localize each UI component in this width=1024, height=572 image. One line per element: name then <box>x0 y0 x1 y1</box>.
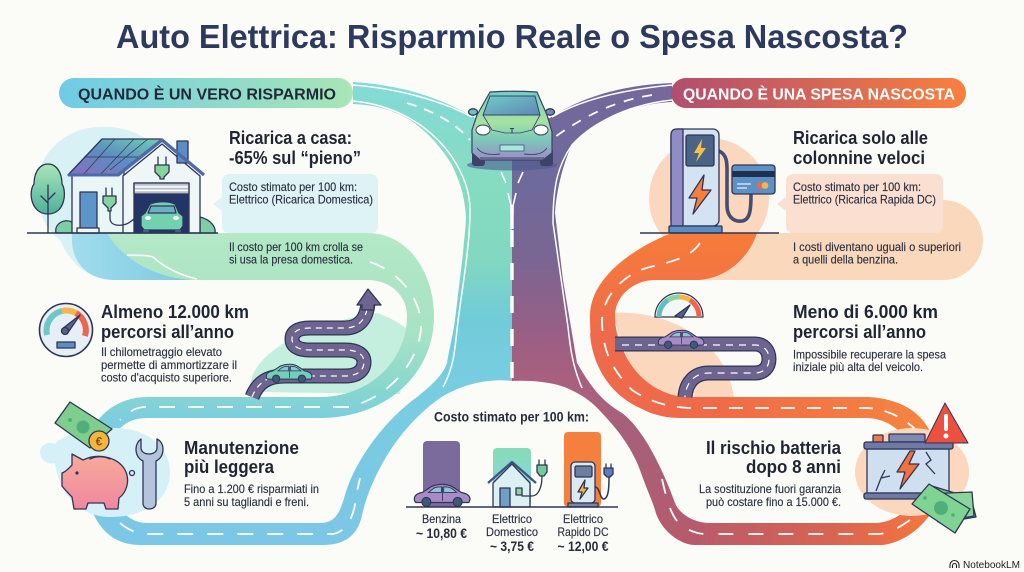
pill: right heading: QUANDO È UNA SPESA NASCOSTA <box>683 84 955 104</box>
icon: plug on gable <box>155 157 169 179</box>
icon: central front car: T <box>510 128 515 135</box>
heading: manutenzione <box>184 437 299 477</box>
callout: left cost bubble: Costo stimato per 100 km: <box>229 180 357 194</box>
text: meno di 6.000 km <box>793 348 946 374</box>
text: manutenzione: Fino a 1.200 € risparmiati in <box>184 482 319 496</box>
heading: ricarica a casa: Ricarica a casa: <box>229 127 352 148</box>
icon: car in garage <box>141 202 183 230</box>
icon: charging station <box>640 129 779 233</box>
heading: manutenzione: più leggera <box>184 456 275 477</box>
icon: right winding road <box>615 344 769 397</box>
icon: plug on wall with cable <box>103 188 116 211</box>
label: elettrico domestico: ~ 3,75 € <box>490 539 534 554</box>
text: rischio batteria <box>699 482 841 509</box>
text: colonnine veloci: I costi diventano uguali o superiori <box>793 240 961 254</box>
icon: banknote <box>55 402 112 448</box>
heading: ricarica solo alle colonnine: colonnine veloci <box>793 147 925 168</box>
text: meno di 6.000 km: iniziale più alta del veicolo. <box>793 360 923 374</box>
left backdrop: house circle <box>36 127 175 280</box>
label: elettrico rapido: Rapido DC <box>558 525 609 539</box>
left road: green loop <box>88 233 434 450</box>
label: elettrico domestico: Domestico <box>486 525 538 539</box>
bar: elettrico domestico <box>493 448 531 507</box>
label: benzina: Benzina <box>422 512 461 526</box>
heading: meno di 6.000 km <box>793 301 938 342</box>
heading: almeno 12.000 km: percorsi all’anno <box>101 321 234 342</box>
heading: manutenzione: Manutenzione <box>184 437 299 458</box>
icon: wrench <box>136 439 163 509</box>
heading: ricarica a casa <box>229 127 361 168</box>
label: elettrico rapido: ~ 12,00 € <box>558 539 609 554</box>
callout: left cost bubble <box>213 174 378 233</box>
label: benzina <box>416 512 467 541</box>
icon: petrol car <box>414 484 470 506</box>
left main road and stem <box>90 82 512 545</box>
text: chilometraggio: permette di ammortizzare il <box>101 358 237 372</box>
icon: euro coin <box>89 431 109 451</box>
heading: ricarica a casa: -65% sul “pieno” <box>229 147 361 168</box>
right road: orange loop <box>590 233 935 445</box>
pill: right heading <box>671 78 966 108</box>
panel: cost comparison <box>406 410 618 554</box>
bar: benzina <box>423 441 460 507</box>
icon: credit card <box>732 165 775 194</box>
text: chilometraggio <box>101 345 237 384</box>
heading: rischio batteria: Il rischio batteria <box>706 437 842 458</box>
heading: rischio batteria: dopo 8 anni <box>746 456 841 477</box>
right backdrop: peach band <box>690 200 983 280</box>
label: elettrico rapido: Elettrico <box>563 512 603 526</box>
label: benzina: ~ 10,80 € <box>416 526 467 541</box>
icon: small house with plug <box>488 460 547 507</box>
callout: left cost bubble: Elettrico (Ricarica Domestica) <box>229 192 373 206</box>
text: chilometraggio: costo d'acquisto superiore. <box>101 370 232 384</box>
heading: cost comparison: Costo stimato per 100 km: <box>434 410 589 424</box>
text: manutenzione <box>184 482 319 509</box>
icon: blue blob behind piggy bank <box>40 428 170 517</box>
text: ricarica a casa: si usa la presa domestica. <box>229 252 353 266</box>
text: ricarica a casa <box>229 240 363 266</box>
heading: meno di 6.000 km: Meno di 6.000 km <box>793 301 938 322</box>
left backdrop: winding road hill <box>250 313 410 394</box>
icon: cracked battery <box>864 434 953 499</box>
logo: NotebookLM: NotebookLM <box>963 559 1020 571</box>
heading: ricarica solo alle colonnine: Ricarica solo alle <box>793 127 928 148</box>
right backdrop: winding road hill <box>612 313 734 397</box>
pill: left heading: QUANDO È UN VERO RISPARMIO <box>78 84 336 104</box>
text: rischio batteria: La sostituzione fuori garanzia <box>699 482 841 496</box>
icon: left speedometer <box>40 304 92 356</box>
heading: almeno 12.000 km: Almeno 12.000 km <box>101 301 249 322</box>
label: elettrico domestico: Elettrico <box>492 512 532 526</box>
text: ricarica a casa: Il costo per 100 km crolla se <box>229 240 363 254</box>
icon: piggy bank <box>62 454 134 509</box>
icon: small charger with plug <box>568 462 613 507</box>
callout: right cost bubble: Elettrico (Ricarica Rapida DC) <box>793 192 936 206</box>
callout: right cost bubble: Costo stimato per 100 km: <box>793 180 921 194</box>
icon: winding road with arrow <box>252 289 381 397</box>
text: chilometraggio: Il chilometraggio elevato <box>101 345 222 359</box>
icon: warning triangle <box>925 403 968 443</box>
text: meno di 6.000 km: Impossibile recuperare la spesa <box>793 348 946 362</box>
icon: central front car <box>467 91 557 170</box>
left road: blue band under house <box>72 233 200 280</box>
text: colonnine veloci: a quelli della benzina. <box>793 252 898 266</box>
label: elettrico domestico <box>486 512 538 554</box>
pill: left heading <box>59 78 353 108</box>
center dashed line <box>501 172 523 378</box>
icon: tree <box>31 164 64 233</box>
icon: right half gauge <box>655 293 703 318</box>
right backdrop: charger circle <box>649 138 769 258</box>
text: rischio batteria: può costare fino a 15.000 €. <box>706 495 841 509</box>
title: Auto Elettrica: Risparmio Reale o Spesa Nascosta? <box>116 18 908 55</box>
heading: almeno 12.000 km <box>101 301 249 342</box>
right main road and stem <box>512 83 929 545</box>
heading: ricarica solo alle colonnine <box>793 127 928 168</box>
text: manutenzione: 5 anni su tagliandi e freni. <box>184 495 309 509</box>
label: elettrico rapido <box>558 512 609 554</box>
icon: money stack <box>912 484 976 533</box>
icon: teal car on road <box>266 364 312 382</box>
icon: purple car on road <box>658 330 704 348</box>
heading: meno di 6.000 km: percorsi all’anno <box>793 321 926 342</box>
text: colonnine veloci <box>793 240 961 266</box>
icon: euro coin: € <box>96 434 103 448</box>
heading: rischio batteria <box>706 437 842 477</box>
icon: house with solar panels <box>27 139 218 233</box>
bar: elettrico rapido <box>564 432 601 507</box>
callout: right cost bubble <box>777 174 943 233</box>
icon: peach blob behind battery <box>855 428 969 516</box>
